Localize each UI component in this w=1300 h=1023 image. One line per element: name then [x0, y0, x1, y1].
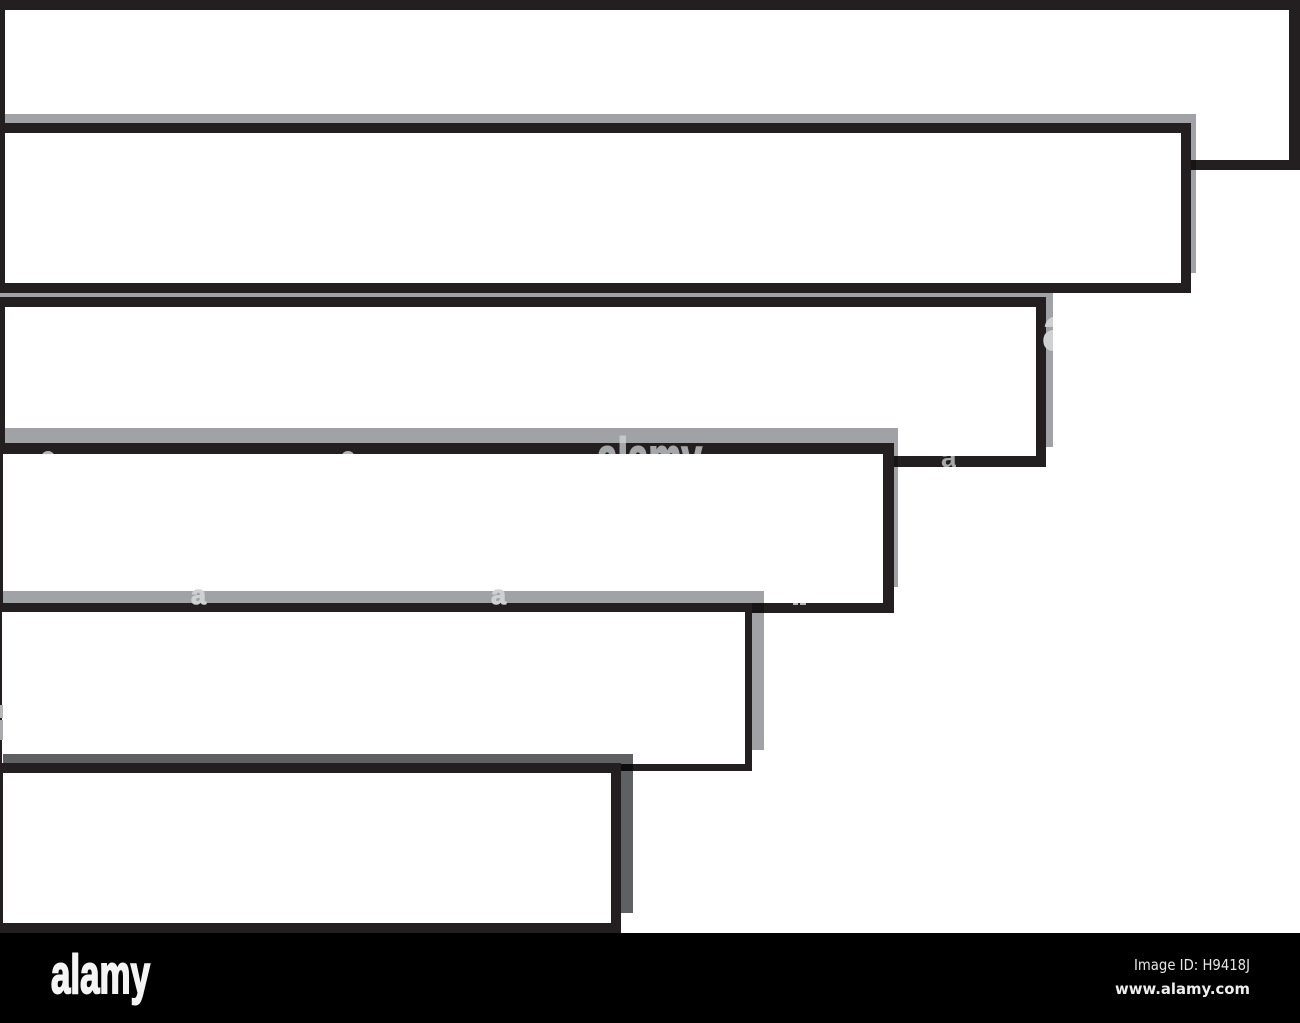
watermark fragments: a	[941, 442, 957, 473]
bar 5	[0, 591, 764, 771]
logo: alamy: alamy	[51, 943, 150, 1005]
bar 6	[0, 754, 633, 933]
bar 3	[0, 293, 1053, 467]
image id: Image ID: H9418J	[1134, 956, 1250, 974]
bar 1	[0, 0, 1300, 170]
website: www.alamy.com	[1115, 980, 1250, 998]
watermark fragments	[0, 295, 1077, 740]
watermark fragments: alamy	[597, 426, 702, 488]
watermark fragments: a	[491, 580, 507, 610]
watermark fragments: a	[191, 580, 207, 610]
bar 4	[0, 428, 898, 613]
bar 2	[0, 114, 1196, 293]
footer band	[0, 933, 1300, 1023]
watermark fragments: alamy	[597, 426, 702, 488]
watermark fragments: a	[1042, 295, 1077, 364]
